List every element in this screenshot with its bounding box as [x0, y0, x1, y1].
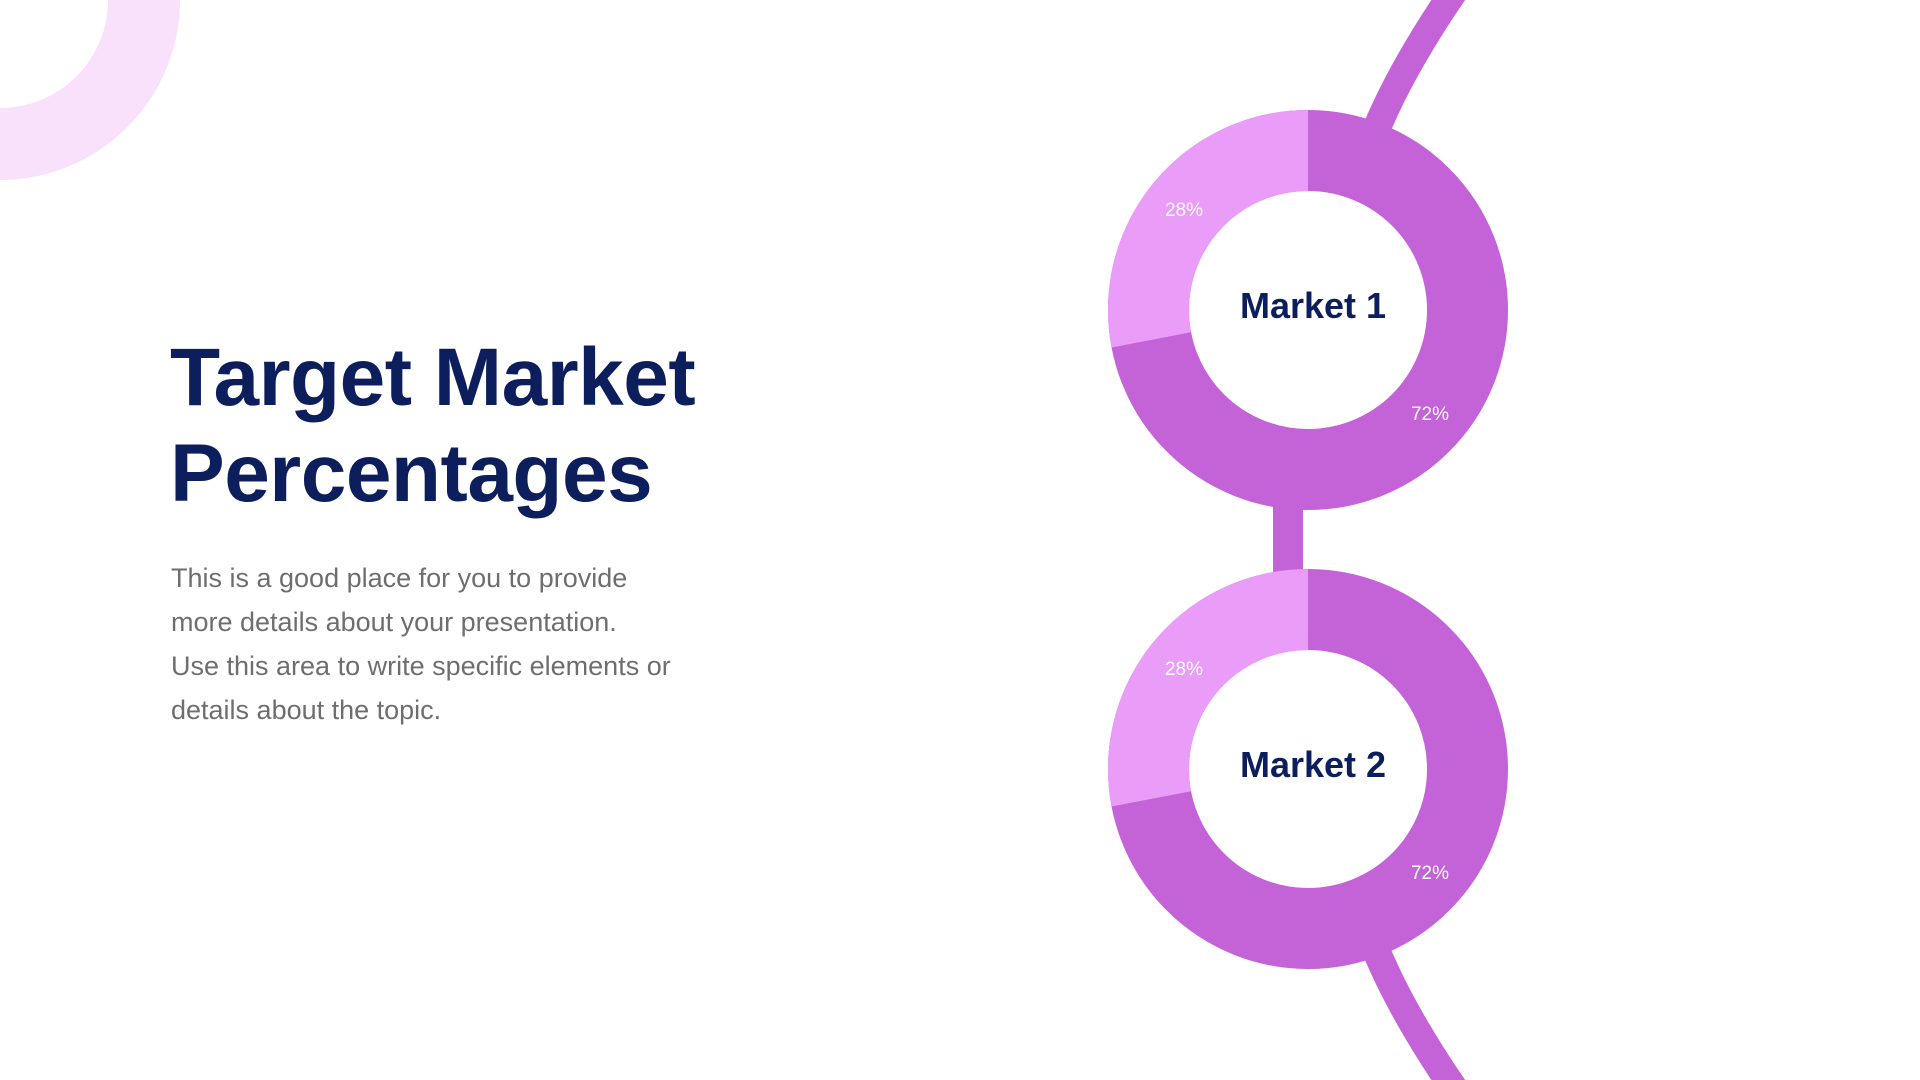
middle connector [1273, 500, 1303, 578]
title: Target Market [170, 332, 695, 423]
body text [171, 563, 671, 725]
body text: more details about your presentation. [171, 607, 617, 637]
corner ring [0, 0, 144, 144]
body text: details about the topic. [171, 695, 441, 725]
donut: market 2: Market 2 [1240, 744, 1386, 785]
top connector curve [1374, 0, 1455, 135]
donut: market 2: 72% [1411, 863, 1449, 884]
body text: This is a good place for you to provide [171, 563, 627, 593]
donut: market 1: 28% [1165, 200, 1203, 221]
donut: market 1 [1148, 150, 1468, 470]
title: Percentages [170, 428, 652, 519]
donut: market 1: 72% [1411, 404, 1449, 425]
title [170, 332, 695, 519]
donut: market 2: 28% [1165, 659, 1203, 680]
donut: market 2 [1148, 610, 1468, 928]
bottom connector curve [1374, 945, 1455, 1080]
donut: market 1: Market 1 [1240, 285, 1386, 326]
body text: Use this area to write specific elements or [171, 651, 671, 681]
